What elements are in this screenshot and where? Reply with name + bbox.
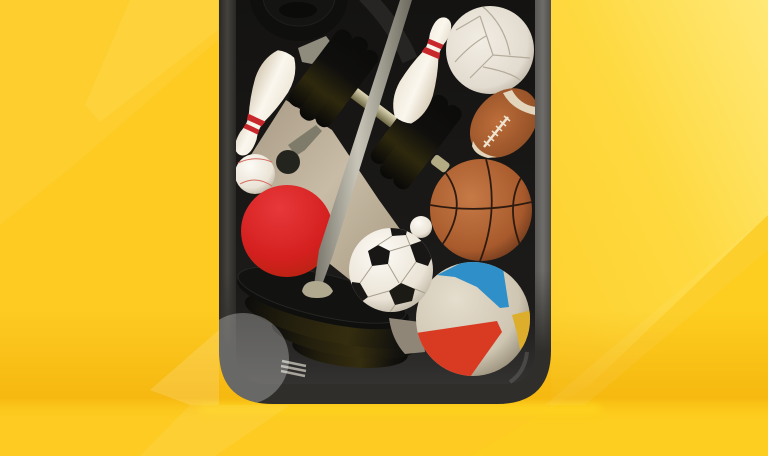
bottom weight plates (237, 267, 414, 378)
cream box lower corner (389, 318, 425, 354)
cream box (249, 100, 402, 280)
bowling pin left (236, 50, 296, 156)
soccer ball (349, 226, 434, 312)
american football (470, 88, 535, 158)
dark tube behind bar (365, 0, 410, 60)
upper collars (276, 36, 332, 174)
baseball (235, 154, 275, 194)
basketball (430, 159, 532, 261)
small cream ball (410, 216, 432, 238)
volleyball (446, 6, 534, 94)
phone inner corner highlight (510, 352, 527, 382)
upper plates (288, 30, 378, 128)
phone body (219, 0, 551, 404)
bowling ball (241, 185, 333, 277)
phone contents (223, 0, 552, 377)
top weight plate (263, 0, 335, 26)
lower plates (371, 95, 462, 190)
axle (350, 88, 397, 128)
dumbbell (276, 23, 465, 193)
diagonal bar (302, 0, 412, 298)
bowling pin right (393, 17, 452, 124)
beach ball (416, 260, 532, 377)
end collar (431, 155, 450, 172)
light beams (140, 215, 768, 456)
translucent circle (219, 313, 289, 402)
